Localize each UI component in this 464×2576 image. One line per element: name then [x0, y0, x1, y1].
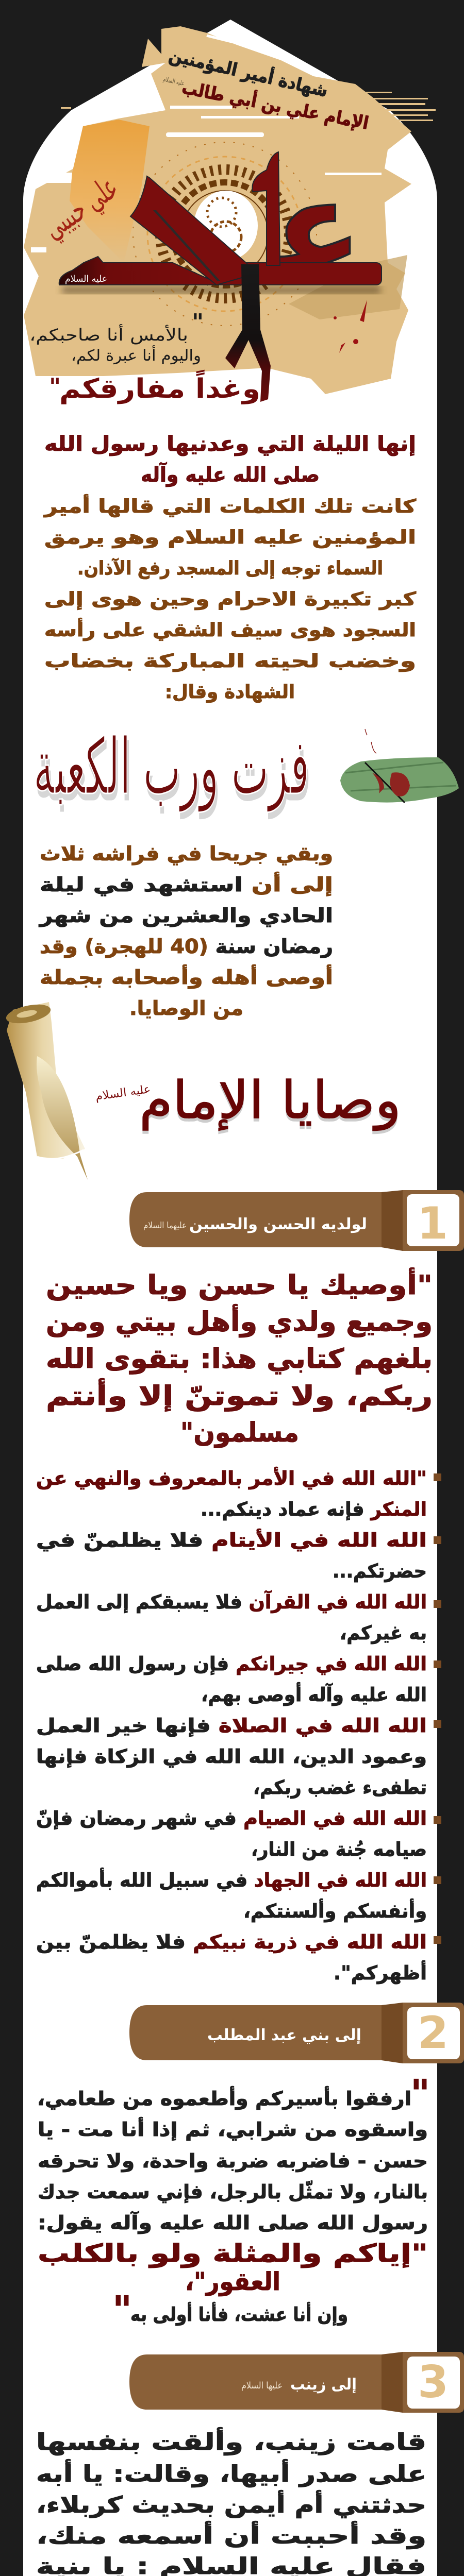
text block: intro: الشهادة وقال:: [165, 682, 295, 703]
text block: wounded for three days: رمضان سنة (40 للهجرة) وقد: [40, 935, 333, 958]
list: advice bullets: "الله الله في الأمر بالمعروف والنهي عن: [36, 1466, 427, 1489]
text block: treat the captive kindly: رسول الله صلى الله عليه وآله يقول:: [38, 2211, 428, 2234]
list: advice bullets: الله الله في جيرانكم فإن رسول الله صلى: [36, 1653, 427, 1675]
list: advice bullets: [36, 1466, 441, 1984]
mandala: [133, 142, 317, 326]
mandala centre detail: [207, 198, 241, 252]
bullet markers: [434, 1473, 441, 1944]
text block: treat the captive kindly: ارفقوا بأسيركم وأطعموه من طعامي،: [37, 2086, 411, 2110]
text block: treat the captive kindly: حسن - فاضربه ضربة واحدة، ولا تحرقه: [38, 2150, 428, 2172]
text block: Zaynab's request: [36, 2427, 426, 2576]
honorific: عليهما السلام: [143, 1221, 187, 1231]
icon: bloodied green turban: [340, 729, 459, 803]
text block: main advice to Hasan and Husayn: وجميع ولدي وأهل بيتي ومن: [46, 1304, 433, 1337]
text block: Zaynab's request: على صدر أبيها، وقالت: يا أبه: [36, 2459, 426, 2487]
white brush streaks: [31, 35, 382, 252]
text block: wounded for three days: أوصى أهله وأصحابه بجملة: [40, 964, 333, 989]
blood drops: [334, 300, 367, 353]
text block: main advice to Hasan and Husayn: بلغهم كتابي هذا: بتقوى الله: [46, 1344, 433, 1375]
section header 1: [129, 1190, 464, 1251]
text block: wounded for three days: من الوصايا.: [129, 997, 243, 1020]
text block: intro: [43, 432, 416, 703]
header label: إلى بني عبد المطلب: [207, 2026, 361, 2044]
text block: Zaynab's request: قامت زينب، وألقت بنفسها: [36, 2427, 426, 2455]
text block: wounded for three days: الحادي والعشرين من شهر: [39, 904, 333, 927]
quote mark: ": [410, 2072, 430, 2115]
heading line 1: شهادة أمير المؤمنين: [167, 43, 330, 101]
quote text: ": [49, 374, 61, 400]
text block: main advice to Hasan and Husayn: ربكم، ولا تموتنّ إلا وأنتم: [46, 1378, 433, 1412]
header label: لولديه الحسن والحسين: [189, 1215, 367, 1233]
text block: treat the captive kindly: "إياكم والمثلة ولو بالكلب: [38, 2239, 428, 2268]
quote text: واليوم أنا عبرة لكم،: [71, 345, 201, 365]
section header 2: [129, 2003, 464, 2063]
text block: intro: السجود هوى سيف الشقي على رأسه: [44, 618, 416, 641]
text block: intro: كانت تلك الكلمات التي قالها أمير: [43, 494, 416, 517]
text block: treat the captive kindly: وإن أنا عشت، فأنا أولى به: [130, 2302, 348, 2326]
panel: header artwork: [24, 26, 436, 404]
list: advice bullets: الله عليه وآله أوصى بهم،: [201, 1682, 427, 1706]
quote text: وغداً مفارقكم: [59, 370, 260, 404]
list: advice bullets: الله الله في القرآن فلا يسبقكم إلى العمل: [36, 1590, 427, 1613]
list: advice bullets: حضرتكم...: [333, 1560, 427, 1582]
text block: main advice to Hasan and Husayn: مسلمون": [180, 1417, 299, 1448]
list: advice bullets: تطفىء غضب ربكم،: [253, 1776, 427, 1799]
letter ain: ع‍: [272, 151, 363, 304]
text block: intro: كبر تكبيرة الاحرام وحين هوى إلى: [44, 589, 416, 610]
tan splatter on the right: [61, 92, 436, 121]
text block: wounded for three days: إلى أن استشهد في ليلة: [40, 872, 333, 896]
number: 1: [417, 1198, 448, 1249]
baseline stroke: [59, 257, 222, 285]
section header 3: [129, 2352, 464, 2413]
text block: intro: إنها الليلة التي وعدنيها رسول الله: [44, 432, 416, 456]
darker brush stroke right: [289, 255, 407, 319]
heading line 2: الإمام علي بن أبي طالب: [180, 76, 371, 134]
logo: Ali: [59, 151, 382, 304]
text block: treat the captive kindly: العقور"،: [185, 2267, 280, 2296]
text block: Zaynab's request: وقد أحببت أن أسمعه منك،: [36, 2521, 426, 2549]
text block: Zaynab's request: حدثتني أم أيمن بحديث كربلاء،: [36, 2490, 426, 2518]
list: advice bullets: المنكر فإنه عماد دينكم...: [201, 1498, 427, 1520]
orange paint patch: [70, 120, 150, 263]
logo shadow: [62, 286, 380, 294]
tan brush background: [24, 26, 411, 394]
quote text: ": [192, 309, 204, 335]
honorific: عليها السلام: [241, 2380, 283, 2391]
red calligraphy left: علي حبيبي: [36, 168, 125, 246]
heading: the Imam's testaments: وصايا الإمام: [139, 1070, 401, 1131]
number: 3: [418, 2357, 449, 2408]
text block: intro: صلى الله عليه وآله: [141, 462, 320, 487]
list: advice bullets: الله الله في الصلاة فإنها خير العمل: [36, 1715, 427, 1737]
text block: intro: وخضب لحيته المباركة بخضاب: [44, 651, 416, 672]
text block: main advice to Hasan and Husayn: [46, 1267, 433, 1448]
list: advice bullets: الله الله في الأيتام فلا يظلمنّ في: [36, 1528, 427, 1552]
number: 2: [418, 2007, 449, 2059]
list: advice bullets: الله الله في الجهاد في سبيل الله بأموالكم: [36, 1868, 427, 1891]
label: peace be upon him: عليه السلام: [65, 274, 107, 284]
slot in diagonal: [153, 210, 220, 281]
list: advice bullets: وعمود الدين، الله الله في الزكاة فإنها: [36, 1745, 427, 1768]
text block: main advice to Hasan and Husayn: "أوصيك يا حسن ويا حسين: [46, 1267, 433, 1301]
text block: treat the captive kindly: [37, 2072, 430, 2331]
list: advice bullets: الله الله في ذرية نبيكم فلا يظلمنّ بين: [36, 1931, 427, 1953]
text block: treat the captive kindly: واسقوه من شرابي، ثم إذا أنا مت - يا: [38, 2117, 428, 2141]
header label: إلى زينب: [290, 2376, 357, 2394]
black ribbon: [225, 264, 271, 402]
list: advice bullets: به غيركم،: [340, 1622, 427, 1644]
honorific: عليه السلام: [94, 1083, 152, 1104]
icon: scroll with feather: [5, 1001, 88, 1180]
text block: wounded for three days: وبقي جريحا في فراشه ثلاث: [40, 842, 333, 866]
text block: intro: المؤمنين عليه السلام وهو يرمق: [44, 527, 416, 548]
list: advice bullets: الله الله في الصيام في شهر رمضان فإنّ: [36, 1807, 427, 1830]
tall stem: [252, 152, 280, 265]
list: advice bullets: أظهركم".: [334, 1960, 427, 1984]
quote text: [29, 309, 260, 404]
list: advice bullets: وأنفسكم وألسنتكم،: [243, 1899, 427, 1922]
text block: treat the captive kindly: بالنار، ولا تمثّل بالرجل، فإني سمعت جدك: [38, 2180, 428, 2203]
text block: intro: السماء توجه إلى المسجد رفع الآذان.: [77, 557, 383, 579]
list: advice bullets: صيامه جُنة من النار،: [251, 1838, 427, 1860]
text block: wounded for three days: [39, 842, 333, 1020]
mandala white centre: [194, 191, 258, 261]
small honorific: عليه السلام: [162, 76, 185, 88]
quote mark: ": [112, 2288, 132, 2331]
quote text: بالأمس أنا صاحبكم،: [29, 324, 188, 345]
diagonal stroke: [130, 176, 258, 285]
